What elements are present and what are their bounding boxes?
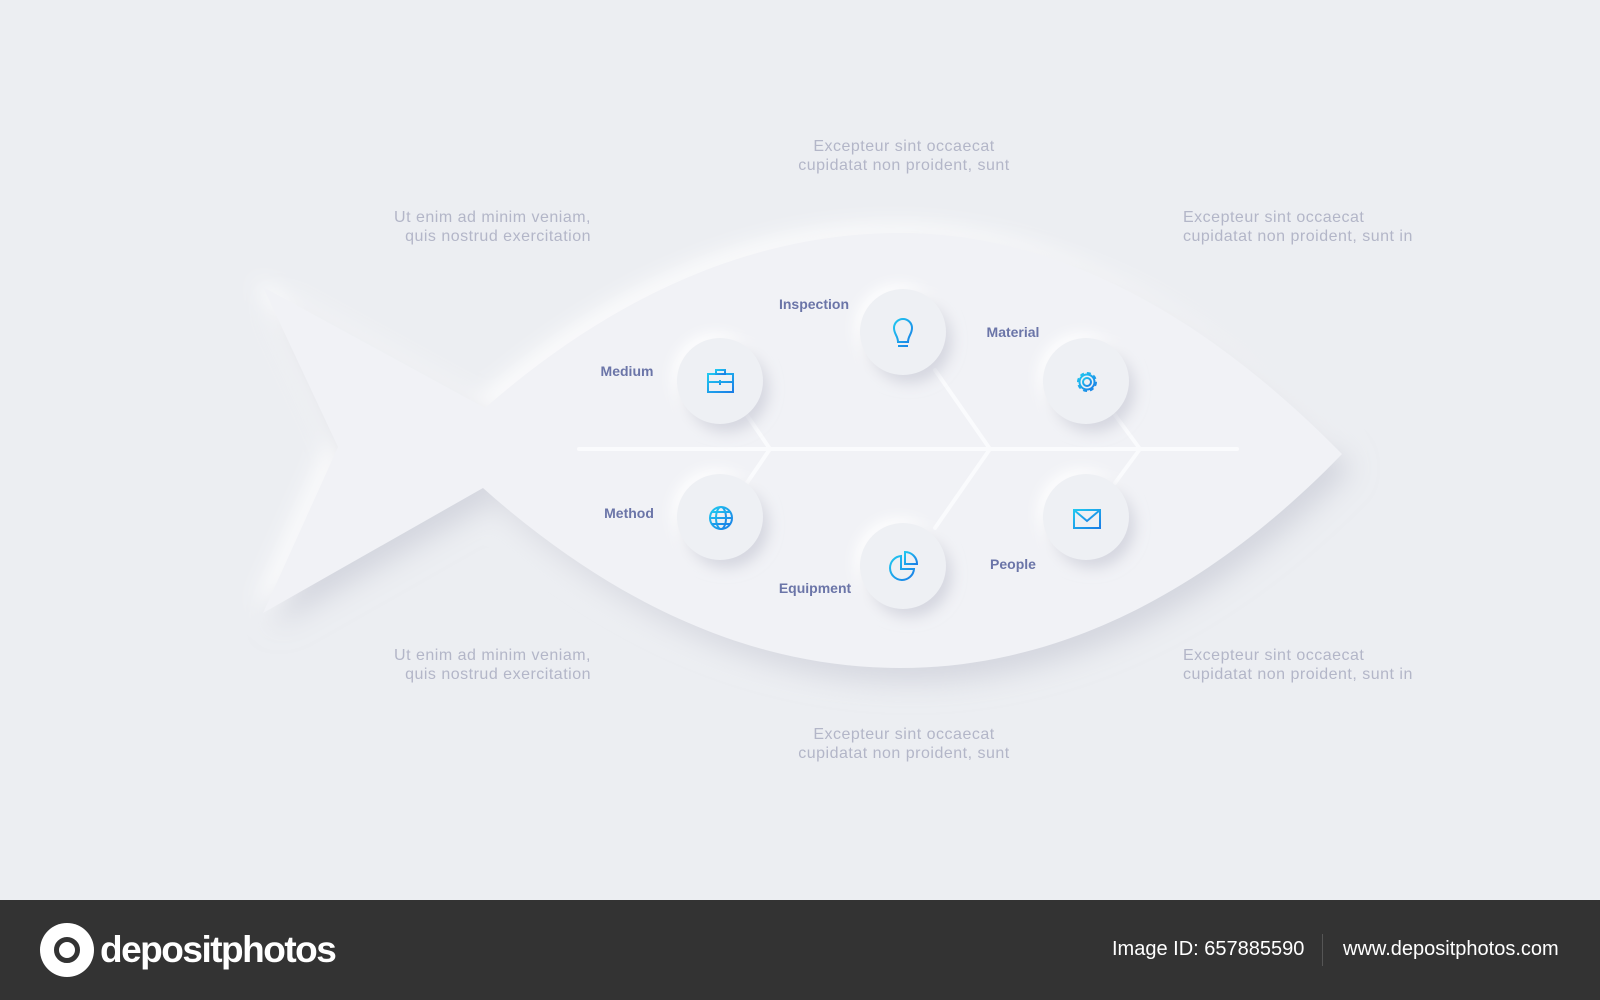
icon: pie chart <box>890 552 917 580</box>
text: top left: quis nostrud exercitation <box>405 228 591 245</box>
label: Method: Method <box>604 505 654 521</box>
icon: globe <box>710 507 732 529</box>
icon: bulb <box>894 319 912 346</box>
text: top right: cupidatat non proident, sunt in <box>1183 228 1413 245</box>
label: People: People <box>990 556 1036 572</box>
icon: envelope <box>1074 510 1100 528</box>
text: top right: Excepteur sint occaecat <box>1183 209 1364 226</box>
text: bottom center: cupidatat non proident, sunt <box>798 745 1010 762</box>
footer image id: Image ID: 657885590 <box>1112 938 1304 960</box>
text: bottom center <box>798 726 1010 762</box>
spine and bones <box>579 370 1237 528</box>
text: top left: Ut enim ad minim veniam, <box>394 209 591 226</box>
text: bottom right: Excepteur sint occaecat <box>1183 647 1364 664</box>
text: top center: cupidatat non proident, sunt <box>798 157 1010 174</box>
circle: Inspection <box>860 289 946 375</box>
label: Material: Material <box>987 324 1039 340</box>
footer logo <box>40 923 336 977</box>
circle: People <box>1043 474 1129 560</box>
circle: Method <box>677 474 763 560</box>
text: bottom left: Ut enim ad minim veniam, <box>394 647 591 664</box>
circle: Equipment <box>860 523 946 609</box>
text: bottom left: quis nostrud exercitation <box>405 666 591 683</box>
fish body <box>263 233 1342 668</box>
label: Inspection: Inspection <box>779 296 849 312</box>
label: Medium: Medium <box>601 363 653 379</box>
text: bottom left <box>394 647 591 683</box>
footer bar <box>0 900 1600 1000</box>
text: top right <box>1183 209 1413 245</box>
text: top center: Excepteur sint occaecat <box>813 138 995 155</box>
circle: Material <box>1043 338 1129 424</box>
label: Equipment: Equipment <box>779 580 851 596</box>
icon: briefcase <box>708 370 733 392</box>
text: bottom right <box>1183 647 1413 683</box>
footer logo: depositphotos <box>100 929 335 970</box>
text: top left <box>394 209 591 245</box>
text: bottom right: cupidatat non proident, sunt in <box>1183 666 1413 683</box>
text: bottom center: Excepteur sint occaecat <box>813 726 995 743</box>
text: top center <box>798 138 1010 174</box>
circle: Medium <box>677 338 763 424</box>
footer url: www.depositphotos.com <box>1343 938 1559 960</box>
icon: gear <box>1078 373 1096 391</box>
